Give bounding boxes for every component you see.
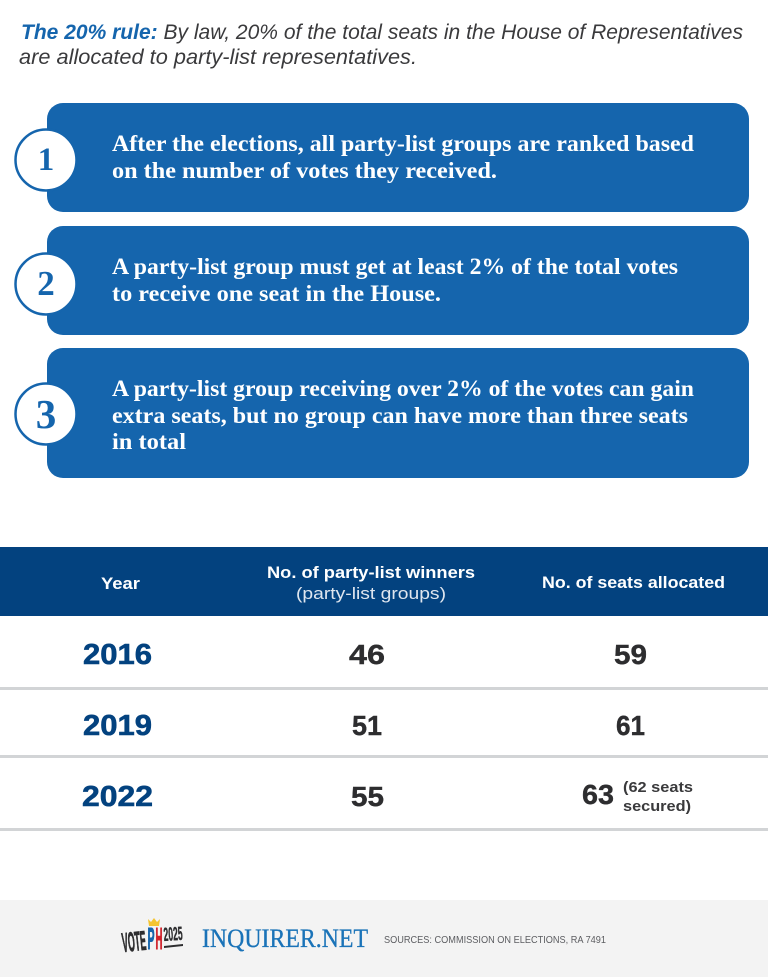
table: party-list winners and seats by year [0,547,768,831]
table header [0,547,768,616]
row: 2016 [0,639,768,690]
icon: number 2 badge [16,254,76,314]
table header: No. of party-list winners [267,563,475,582]
row: 2016: 2016 [83,639,152,671]
table header: No. of seats allocated [542,573,725,592]
logo: VotePH 2025: P [148,921,154,956]
row: 2016: 59 [614,639,647,670]
step 1 text [112,131,694,183]
sources: SOURCES: COMMISSION ON ELECTIONS, RA 7491 [384,934,606,946]
row: 2019: 61 [616,710,645,741]
row: 2022: 2022 [82,781,153,813]
row: 2016: 46 [349,639,385,670]
footer: 2025 [163,924,183,946]
icon: number 1 badge: 1 [38,142,54,178]
footer [0,900,768,977]
panel: step 3 [16,348,749,478]
intro text: the 20% rule: The 20% rule: By law, 20% of the total seats in the House of Representatives [21,21,743,44]
icon: number 2 badge: 2 [37,264,55,303]
logo: VotePH 2025: H [156,921,162,956]
table header: (party-list groups) [296,584,446,603]
row: 2019: 2019 [83,710,152,742]
row: 2022 [0,779,768,831]
note: 62 seats secured [623,779,693,815]
table header: Year [101,574,140,593]
icon: number 3 badge [16,384,76,444]
icon: number 3 badge: 3 [36,391,56,437]
step 3 text: in total [112,429,186,454]
step 2 text: to receive one seat in the House. [112,281,441,306]
icon: number 1 badge [16,130,76,190]
step 3 text [112,376,694,454]
step 1 text: After the elections, all party-list groups are ranked based [112,131,694,156]
panel: step 2 [16,226,749,335]
logo: Inquirer.net: INQUIRER.NET [202,924,368,953]
row: 2022: 63 [582,779,614,810]
logo: VotePH 2025: VOTE [120,926,147,958]
step 3 text: A party-list group receiving over 2% of the votes can gain [112,376,694,401]
intro text: the 20% rule [19,21,743,69]
step 2 text [112,254,678,306]
row: 2019 [0,710,768,758]
step 2 text: A party-list group must get at least 2% of the total votes [112,254,678,279]
row: 2022: 55 [351,781,384,812]
panel: step 1 [16,103,749,212]
step 3 text: extra seats, but no group can have more than three seats [112,403,688,428]
intro text: the 20% rule: are allocated to party-list representatives. [19,46,417,69]
note: 62 seats secured: secured) [623,798,691,815]
row: 2019: 51 [352,710,382,741]
step 1 text: on the number of votes they received. [112,158,497,183]
note: 62 seats secured: (62 seats [623,779,693,796]
